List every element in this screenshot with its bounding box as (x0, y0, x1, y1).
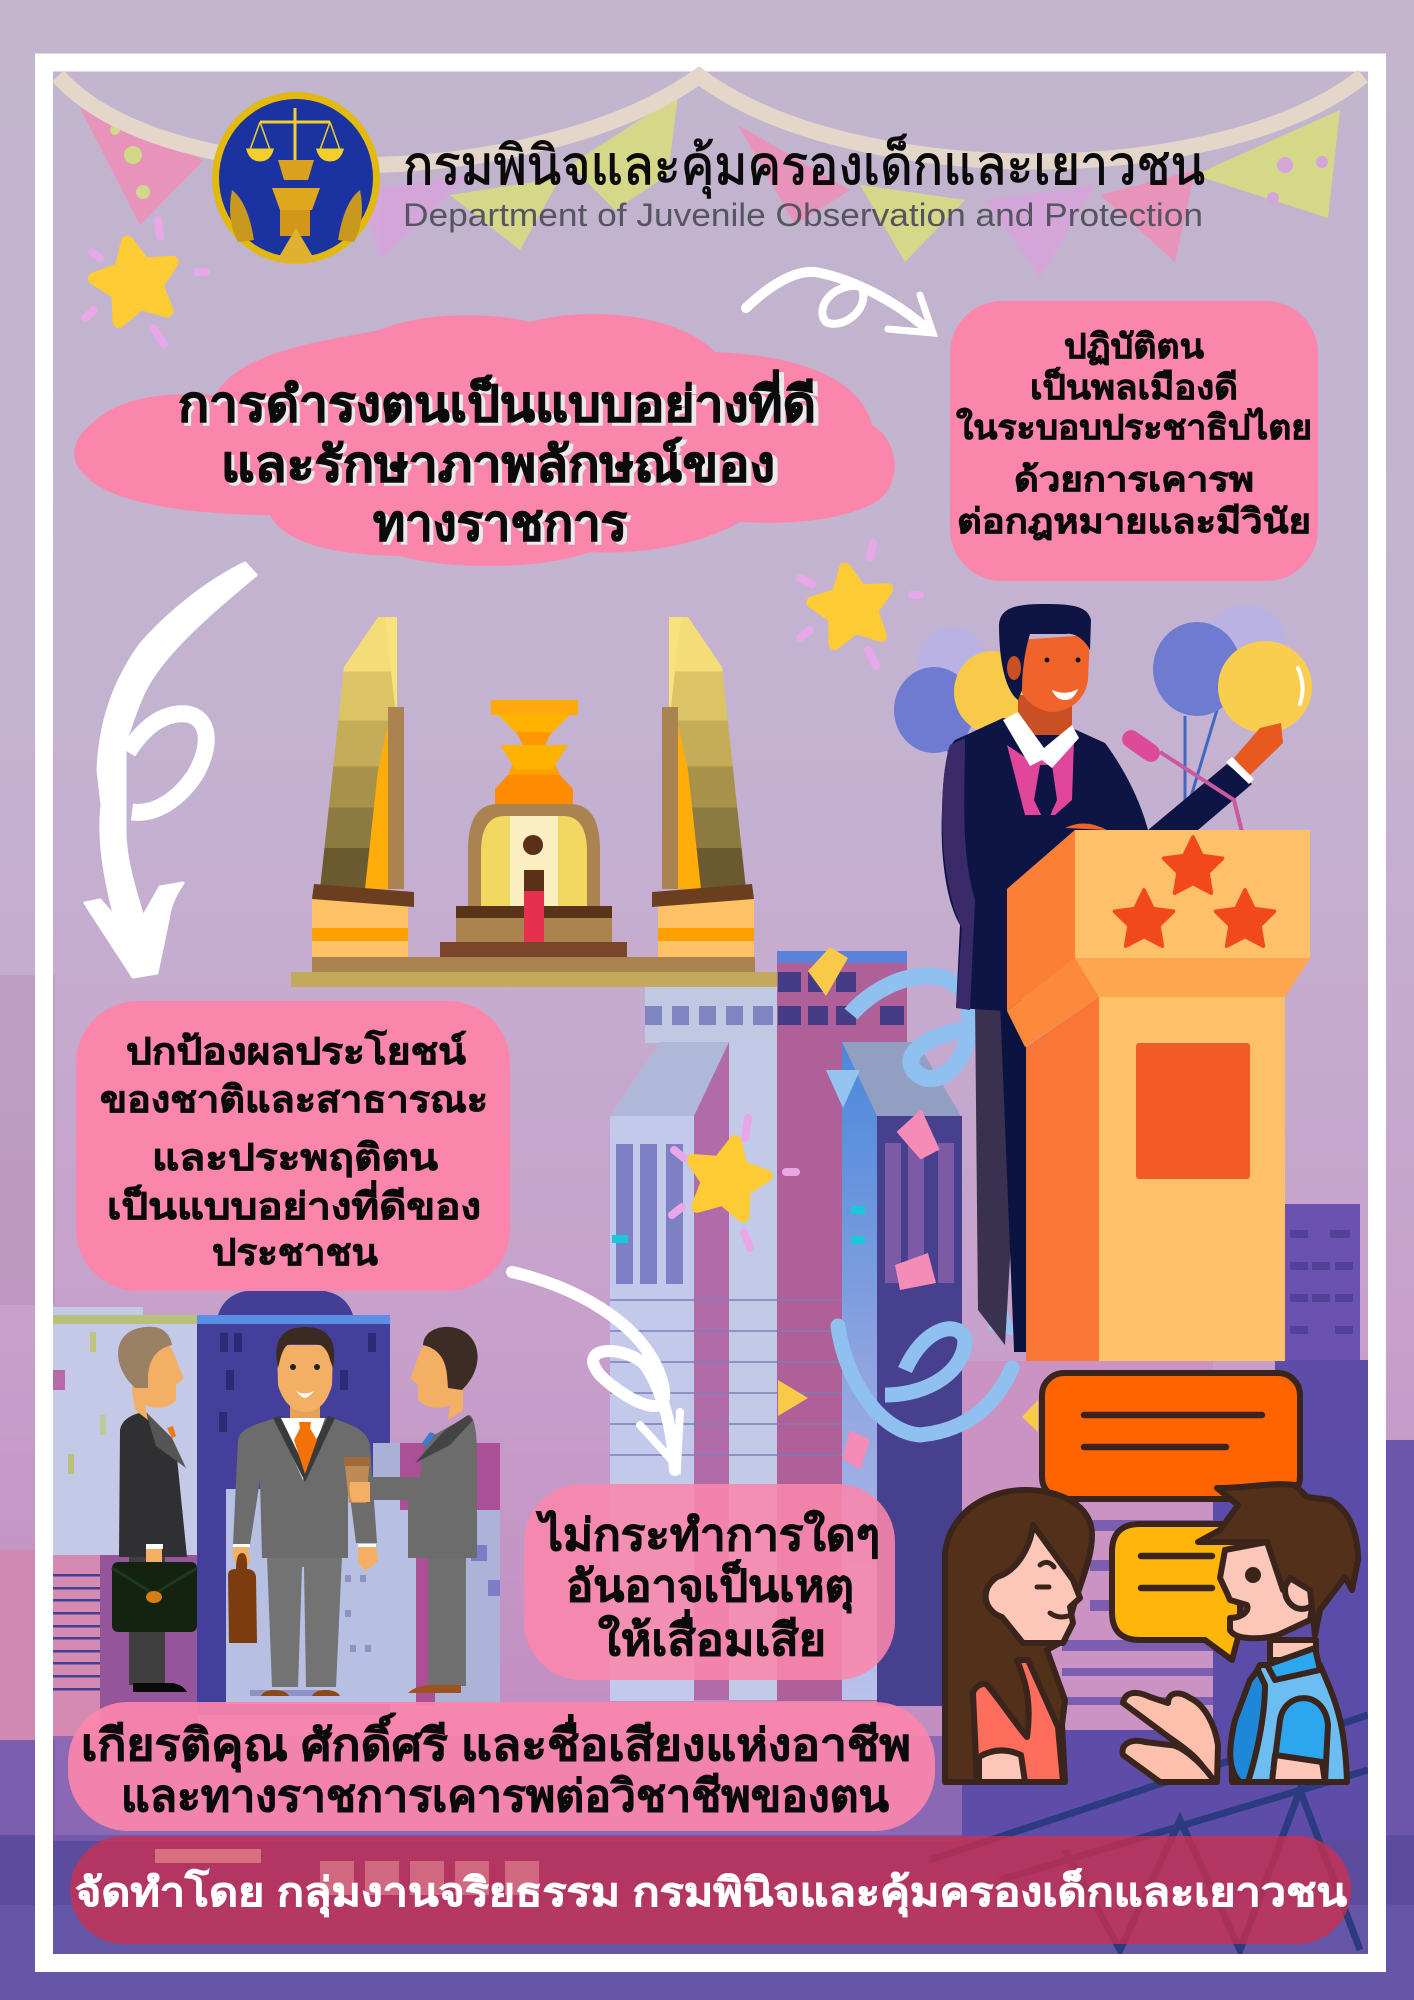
panel: protect national interest: ปกป้องผลประโยชน์ (126, 1029, 466, 1072)
talking couple (945, 1373, 1358, 1782)
confetti and squiggles (778, 947, 1038, 1470)
title text: ทางราชการ (377, 500, 631, 554)
right man (344, 1327, 478, 1693)
title text: และรักษาภาพลักษณ์ของ (224, 440, 780, 495)
panel: honor and reputation: เกียรติคุณ ศักดิ์ศรี และชื่อเสียงแห่งอาชีพ (81, 1712, 911, 1773)
left wing (312, 617, 414, 957)
bridge truss (930, 1715, 1368, 1950)
orange speech bubble (1042, 1373, 1300, 1499)
panel: good citizen: ต่อกฎหมายและมีวินัย (957, 503, 1311, 541)
panel: honor and reputation (68, 1702, 935, 1831)
big white arrow left (85, 563, 256, 977)
panel: good citizen: ด้วยการเคารพ (1014, 461, 1254, 499)
panel: good citizen: ปฏิบัติตน (1064, 328, 1204, 366)
heading cloud (74, 314, 895, 566)
panel: good citizen: เป็นพลเมืองดี (1030, 366, 1238, 407)
podium (1007, 830, 1310, 1361)
girl (945, 1490, 1092, 1782)
panel: no damaging action: อันอาจเป็นเหตุ (566, 1559, 854, 1614)
panel: protect national interest: ของชาติและสาธารณะ (100, 1079, 488, 1120)
democracy monument (291, 617, 777, 987)
header: department name: กรมพินิจและคุ้มครองเด็กและเยาวชน (403, 134, 1205, 199)
brown case (228, 1553, 257, 1643)
logo seal (212, 92, 380, 264)
arrow to middle panel (512, 1272, 680, 1470)
title text: และรักษาภาพลักษณ์ของ (221, 437, 775, 492)
background city: lower-left buildings (53, 1290, 500, 1740)
star center (672, 1118, 796, 1248)
boy (1198, 1484, 1358, 1782)
left man (112, 1327, 197, 1692)
bunting garland (58, 76, 1363, 278)
panel: good citizen (950, 301, 1318, 581)
header: department name (403, 134, 1205, 233)
footer organizer banner (70, 1836, 1351, 1944)
background city: central towers (610, 951, 962, 1706)
star top left (85, 220, 206, 344)
balloons (894, 605, 1312, 830)
stars on podium (1115, 837, 1274, 946)
title text: การดำรงตนเป็นแบบอย่างที่ดี (178, 369, 816, 432)
right wing (652, 617, 754, 957)
panel: protect national interest: ประชาชน (212, 1232, 378, 1273)
business men (112, 1327, 478, 1696)
panel: protect national interest: เป็นแบบอย่างที่ดีของ (107, 1180, 481, 1227)
panel: protect national interest: และประพฤติตน (152, 1137, 438, 1178)
title text: การดำรงตนเป็นแบบอย่างที่ดี (181, 372, 821, 435)
arrow to top-right panel (746, 272, 933, 333)
background city: lower-right buildings (53, 1204, 1368, 1841)
hands (1122, 1693, 1218, 1782)
scales (248, 108, 342, 170)
panel: protect national interest (76, 1001, 510, 1291)
speaker (942, 604, 1283, 1352)
title text (178, 369, 821, 554)
panel: no damaging action: ไม่กระทำการใดๆ (536, 1509, 880, 1560)
panel: no damaging action: ให้เสื่อมเสีย (598, 1609, 826, 1665)
panel: no damaging action (524, 1484, 895, 1680)
yellow speech bubble (1112, 1524, 1240, 1660)
title text: ทางราชการ (373, 497, 627, 551)
panel: good citizen: ในระบอบประชาธิปไตย (956, 407, 1312, 447)
microphone (1119, 727, 1242, 832)
center man (228, 1327, 378, 1696)
panel: honor and reputation: และทางราชการเคารพต่อวิชาชีพของตน (121, 1772, 889, 1821)
footer organizer banner: จัดทำโดย กลุ่มงานจริยธรรม กรมพินิจและคุ้มครองเด็กและเยาวชน (75, 1867, 1347, 1918)
header: department name: Department of Juvenile Observation and Protection (403, 197, 1203, 233)
star near monument (800, 543, 920, 666)
